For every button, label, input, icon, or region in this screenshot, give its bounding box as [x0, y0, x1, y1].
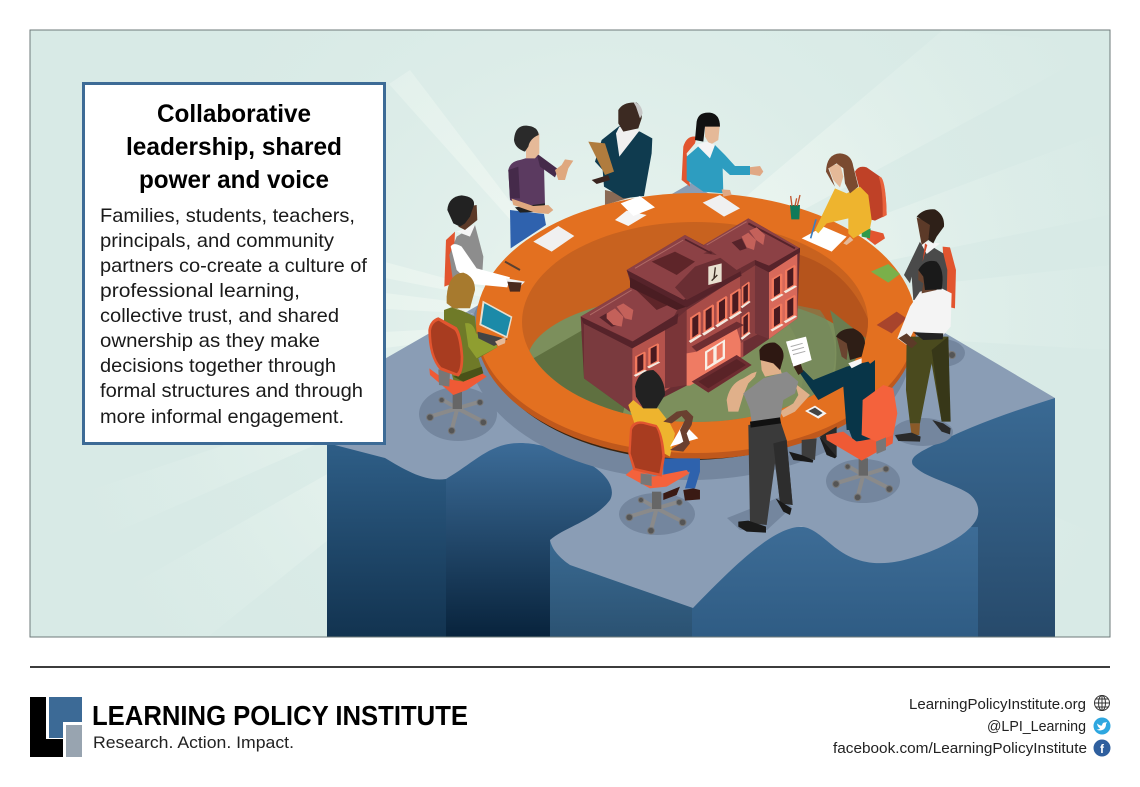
icon: globe: [1094, 696, 1110, 710]
callout body text: professional learning,: [100, 280, 300, 302]
icon: twitter: [1094, 718, 1110, 734]
person: man in purple shirt: [508, 126, 573, 248]
person: man in navy jacket seated: [786, 328, 875, 463]
person: woman in yellow sweater writing: [811, 153, 887, 245]
entrance: [687, 322, 752, 393]
tagline: Research. Action. Impact.: [93, 734, 294, 752]
twitter handle: @LPI_Learning: [987, 719, 1086, 735]
icon: facebook: [1094, 740, 1110, 756]
person: man in gray suit: [904, 209, 956, 308]
right wing left wall: [755, 263, 769, 339]
icon: facebook: f: [1100, 742, 1105, 756]
callout heading: [126, 100, 342, 194]
right wing roof: [703, 218, 800, 270]
chimneys: [599, 227, 765, 327]
callout body text: partners co-create a culture of: [100, 255, 368, 277]
puzzle-piece platform top: [327, 183, 1055, 608]
person: woman with laptop seated, chair: [427, 273, 512, 434]
callout body text: ownership as they make: [100, 330, 320, 352]
round orange table: [476, 193, 916, 460]
callout body text: collective trust, and shared: [100, 305, 339, 327]
callout body text: more informal engagement.: [100, 406, 344, 428]
recess under center roof: [630, 277, 687, 310]
website link: LearningPolicyInstitute.org: [909, 697, 1086, 713]
callout body text: principals, and community: [100, 230, 334, 252]
background sun rays: [386, 89, 884, 348]
clock: [708, 263, 722, 285]
left wing roof: [581, 287, 677, 342]
callout body text: formal structures and through: [100, 380, 363, 402]
table inner well: [520, 220, 872, 430]
callout body text: Families, students, teachers,: [100, 205, 355, 227]
clock gable: [675, 255, 742, 300]
person: older man with clipboard: [588, 102, 652, 205]
windows: [634, 352, 647, 377]
callout heading: leadership, shared: [126, 133, 342, 161]
person: woman in yellow shirt seated, chair: [626, 370, 700, 534]
center roof: [627, 235, 742, 301]
logo mark: [30, 697, 82, 757]
callout text box: [84, 84, 384, 444]
roof block: [652, 252, 695, 275]
pilaster: [665, 310, 687, 388]
phone on table: [805, 406, 827, 419]
chair floor shadows: [419, 339, 965, 535]
footer divider: [30, 666, 1110, 668]
left wing front wall: [632, 330, 670, 407]
legs: [789, 427, 837, 463]
platform blue side columns: [327, 398, 1055, 637]
chair wheels: right back: [948, 350, 956, 359]
facebook link: facebook.com/LearningPolicyInstitute: [833, 741, 1087, 757]
callout body text: [100, 205, 368, 428]
center block wall: [687, 273, 743, 386]
right wing front wall: [769, 253, 797, 339]
sky background: [30, 30, 1110, 637]
person: man with gray vest: [444, 195, 525, 292]
callout body text: decisions together through: [100, 355, 336, 377]
building silhouette: [581, 218, 800, 413]
person: man in gray t-shirt standing: [727, 343, 810, 533]
person: woman in blue sweater: [682, 113, 763, 197]
school building model: [581, 218, 800, 413]
illustration panel border: [30, 30, 1110, 637]
chair: navy jacket man: [826, 385, 897, 501]
table floor shadow: [474, 304, 906, 480]
callout heading: power and voice: [139, 166, 329, 194]
person: woman in white shirt standing: [895, 261, 952, 442]
callout heading: Collaborative: [157, 100, 311, 128]
table items: newspapers and papers: [505, 195, 907, 333]
left wing left wall: [584, 322, 632, 413]
organisation name: LEARNING POLICY INSTITUTE: [92, 700, 468, 731]
